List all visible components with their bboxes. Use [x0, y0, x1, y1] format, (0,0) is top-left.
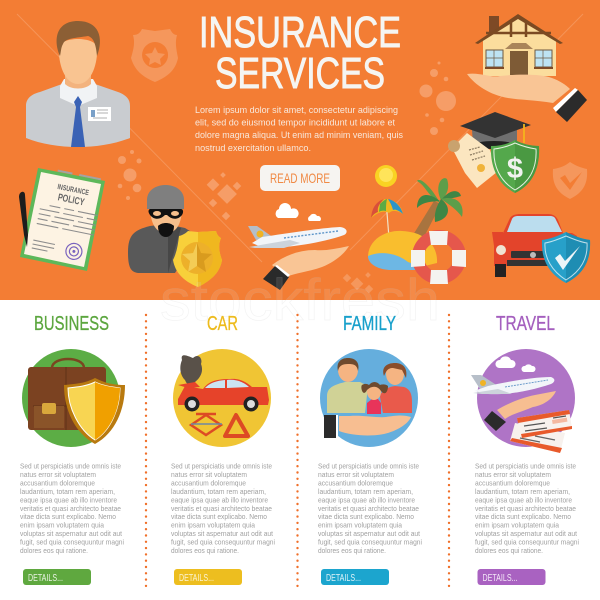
icon: insurance policy document: INSURANCE: [57, 182, 90, 197]
text block: business: vitae dicta sunt explicabo. Nemo: [20, 512, 116, 521]
text block: family: voluptas sit aspernatur aut odit aut: [318, 529, 420, 538]
text block: business: laudantium, totam rem aperiam,: [20, 487, 115, 496]
text block: business: accusantium doloremque: [20, 478, 95, 488]
intro text block: elit, sed do eiusmod tempor incididunt ut labore et: [195, 118, 395, 128]
icon: check shield watermark: [553, 162, 587, 199]
icon: thief: [128, 185, 198, 273]
title: INSURANCE: [199, 8, 401, 57]
text block: business: voluptas sit aspernatur aut odit aut: [20, 529, 122, 538]
text block: car: accusantium doloremque: [171, 478, 246, 488]
text block: business: fugit, sed quia consequuntur magni: [20, 538, 124, 546]
button: car details: DETAILS...: [179, 573, 214, 584]
text block: car: vitae dicta sunt explicabo. Nemo: [171, 512, 267, 521]
icon: gold police badge: [173, 231, 222, 287]
icon: palm tree: [413, 178, 463, 237]
text block: business: natus error sit voluptatem: [20, 470, 96, 479]
button: family details: [321, 569, 389, 585]
button: business details: [23, 569, 91, 585]
text block: travel: Sed ut perspiciatis unde omnis iste: [475, 462, 576, 470]
button: travel details: DETAILS...: [482, 573, 518, 584]
icon: dollar shield: $: [507, 153, 523, 185]
icon: insurance policy document: POLICY: [57, 192, 86, 208]
heading: car: CAR: [207, 313, 238, 335]
text block: travel: vitae dicta sunt explicabo. Nemo: [475, 512, 571, 521]
text block: travel: [475, 462, 579, 555]
intro text block: dolore magna aliqua. Ut enim ad minim veniam, quis: [195, 130, 403, 141]
icon: dollar shield: [491, 140, 539, 193]
text block: car: eaque ipsa quae ab illo inventore: [171, 496, 268, 504]
button: business details: DETAILS...: [28, 573, 63, 584]
icon: diploma scroll: [448, 133, 497, 188]
icon: island: [368, 231, 437, 270]
icon: beach umbrella: [371, 199, 403, 238]
text block: business: [20, 462, 124, 555]
icon: blue check shield: [542, 232, 590, 283]
text block: family: veritatis et quasi architecto beatae: [318, 504, 419, 513]
text block: family: Sed ut perspiciatis unde omnis iste: [318, 462, 419, 470]
text block: travel: voluptas sit aspernatur aut odit aut: [475, 529, 577, 538]
text block: family: vitae dicta sunt explicabo. Nemo: [318, 512, 414, 521]
intro text block: nostrud exercitation ullamco.: [195, 143, 311, 154]
heading: travel: TRAVEL: [496, 313, 555, 335]
icon: sun: [375, 165, 397, 187]
text block: family: enim ipsam voluptatem quia: [318, 520, 403, 530]
decorative bubbles left: [118, 150, 142, 200]
text block: car: [171, 462, 275, 555]
icon: airplane: [248, 226, 347, 248]
panel: orange header: [0, 0, 600, 300]
icon: travel circle: [471, 349, 575, 453]
icon: business circle: [22, 349, 125, 447]
text block: family: accusantium doloremque: [318, 478, 393, 488]
text block: business: enim ipsam voluptatem quia: [20, 520, 105, 530]
text block: travel: fugit, sed quia consequuntur magni: [475, 538, 579, 546]
text block: car: fugit, sed quia consequuntur magni: [171, 538, 275, 546]
read more button: [260, 165, 340, 191]
read more button: READ MORE: [270, 170, 330, 186]
icon: family circle: [320, 349, 418, 447]
icon: insurance policy document: [20, 168, 105, 271]
icon: hand holding airplane: [263, 246, 349, 290]
icon: car circle: [173, 349, 271, 447]
text block: car: veritatis et quasi architecto beatae: [171, 504, 272, 513]
title: [199, 8, 401, 98]
icon: cloud small right: [308, 214, 321, 221]
text block: business: Sed ut perspiciatis unde omnis iste: [20, 462, 121, 470]
text block: car: Sed ut perspiciatis unde omnis iste: [171, 462, 272, 470]
watermark logo diamonds: [343, 272, 373, 293]
heading: business: BUSINESS: [34, 313, 109, 335]
panel: white lower section: [0, 300, 600, 600]
decorative bubbles right: [420, 62, 456, 135]
icon: lifebuoy: [411, 231, 466, 284]
text block: family: natus error sit voluptatem: [318, 470, 394, 479]
text block: business: dolores eos qui ratione.: [20, 546, 88, 555]
text block: travel: eaque ipsa quae ab illo inventore: [475, 496, 572, 504]
text block: business: eaque ipsa quae ab illo inventore: [20, 496, 117, 504]
text block: car: enim ipsam voluptatem quia: [171, 520, 256, 530]
icon: red car: [492, 214, 577, 277]
title: SERVICES: [215, 49, 385, 98]
text block: family: laudantium, totam rem aperiam,: [318, 487, 413, 496]
text block: travel: natus error sit voluptatem: [475, 470, 551, 479]
text block: car: voluptas sit aspernatur aut odit aut: [171, 529, 273, 538]
icon: agent: [26, 21, 130, 147]
text block: business: veritatis et quasi architecto beatae: [20, 504, 121, 513]
text block: travel: veritatis et quasi architecto beatae: [475, 504, 576, 513]
intro text block: Lorem ipsum dolor sit amet, consectetur adipiscing: [195, 105, 398, 116]
icon: house in hand: [467, 14, 587, 122]
text block: car: natus error sit voluptatem: [171, 470, 247, 479]
text block: family: fugit, sed quia consequuntur magni: [318, 538, 422, 546]
button: travel details: [478, 569, 546, 585]
text block: car: laudantium, totam rem aperiam,: [171, 487, 266, 496]
button: family details: DETAILS...: [326, 573, 361, 584]
text block: travel: accusantium doloremque: [475, 478, 550, 488]
heading: family: FAMILY: [343, 313, 396, 335]
text block: travel: dolores eos qui ratione.: [475, 546, 543, 555]
icon: police badge watermark: [131, 29, 178, 82]
icon: graduation cap: [460, 112, 531, 149]
icon: cloud small: [276, 203, 299, 218]
decorative diamonds: [207, 172, 241, 220]
text block: family: dolores eos qui ratione.: [318, 546, 386, 555]
text block: travel: laudantium, totam rem aperiam,: [475, 487, 570, 496]
button: car details: [174, 569, 242, 585]
text block: car: dolores eos qui ratione.: [171, 546, 239, 555]
intro text block: [195, 105, 403, 154]
column divider dots: [146, 315, 449, 587]
watermark: stockfresh: [160, 268, 440, 333]
icon: pen: [19, 192, 28, 247]
text block: family: eaque ipsa quae ab illo inventore: [318, 496, 415, 504]
text block: family: [318, 462, 422, 555]
text block: travel: enim ipsam voluptatem quia: [475, 520, 560, 530]
